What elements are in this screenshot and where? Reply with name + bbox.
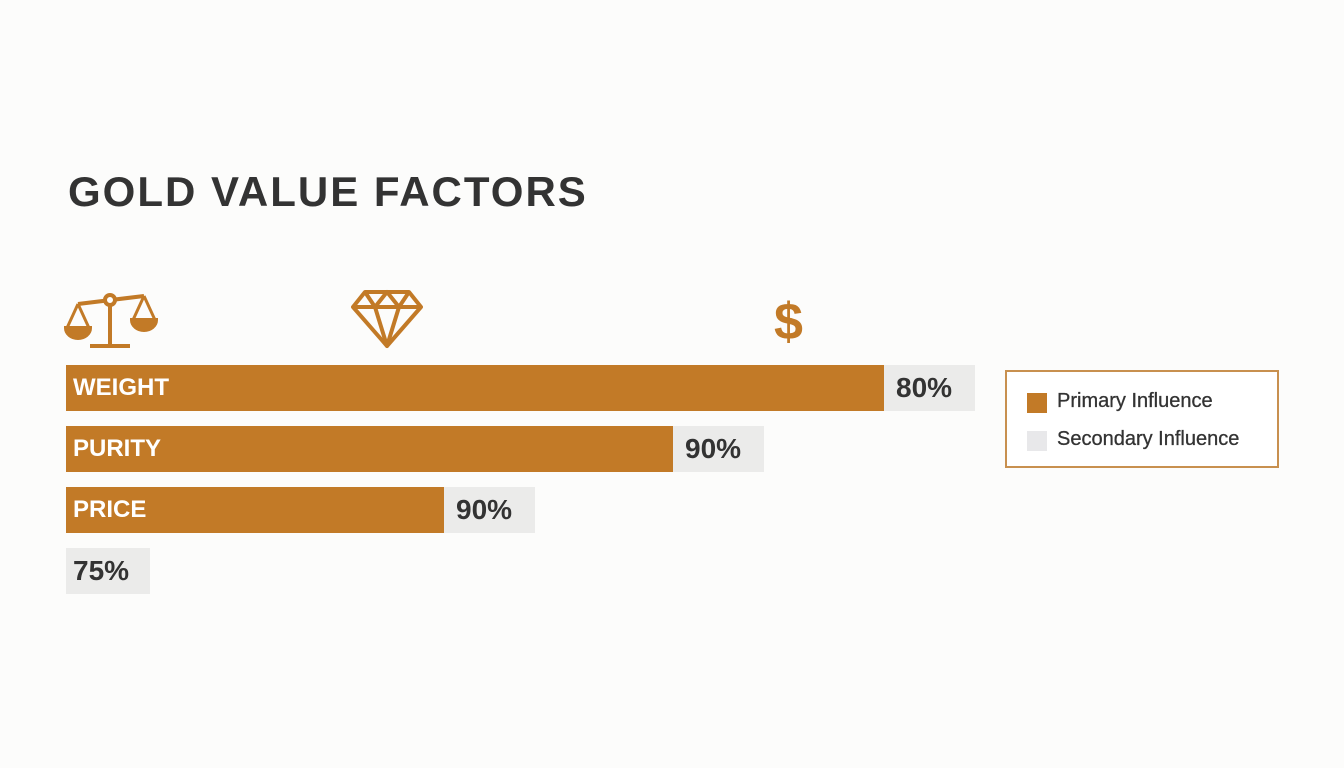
legend: [1005, 370, 1279, 468]
bar: purity: [66, 426, 764, 472]
bar: extra 75%: [66, 548, 150, 594]
bar: purity: 90%: [685, 433, 741, 464]
bar: price: 90%: [456, 494, 512, 525]
bar: extra 75%: 75%: [73, 555, 129, 586]
bar: weight: WEIGHT: [73, 374, 169, 401]
bar: purity: PURITY: [73, 435, 161, 462]
icon: scale: [64, 293, 158, 348]
legend: Primary Influence: [1057, 390, 1213, 412]
icon: dollar: $: [774, 293, 803, 351]
bar: price: [66, 487, 535, 533]
legend: Secondary Influence: [1057, 428, 1239, 450]
bar: weight: 80%: [896, 372, 952, 403]
bar: weight: [66, 365, 975, 411]
icon: diamond: [351, 290, 423, 348]
bar: price: PRICE: [73, 496, 146, 523]
title: GOLD VALUE FACTORS: [68, 168, 588, 215]
